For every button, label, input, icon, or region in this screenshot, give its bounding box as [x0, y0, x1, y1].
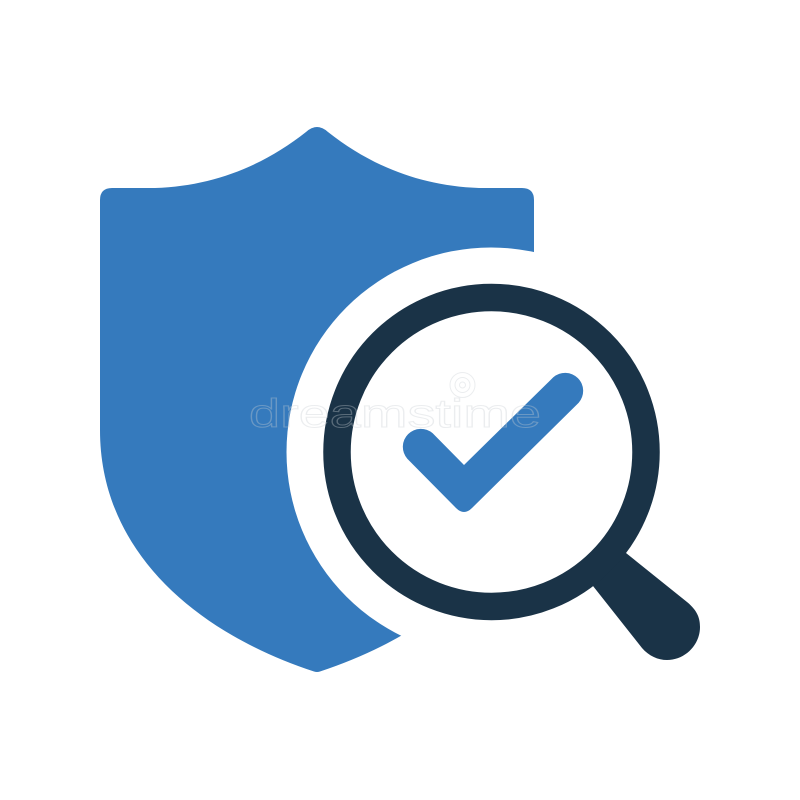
icon: magnifying glass: [337, 298, 700, 660]
icon: check mark: [403, 373, 583, 512]
watermark text: dreamstime: [249, 392, 541, 436]
magnifier handle: [586, 546, 700, 660]
white circular cut-out around the magnifier: [286, 248, 696, 656]
watermark: [249, 372, 541, 436]
watermark swirl logo: [450, 372, 475, 398]
icon: blue shield: [100, 127, 534, 672]
magnifier lens ring: [337, 298, 646, 606]
